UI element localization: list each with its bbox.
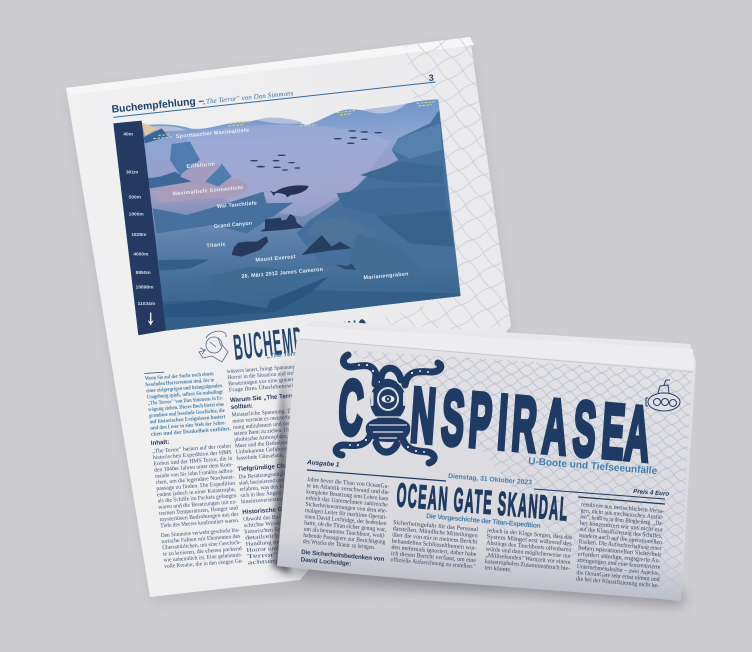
column 4: hohen operationellen Sicherheit — [578, 545, 662, 558]
column 1: onen David Lochridge, der bedenken — [304, 514, 387, 527]
fish schools — [250, 130, 382, 171]
intro text: Umgebung spielt, sollten Sie unbedingt — [147, 389, 223, 401]
intro text: „The Terror" von Dan Simmons in Er- — [147, 395, 224, 407]
section title: BUCHEMPFEHLUNG — [231, 312, 371, 368]
column 4: her konzentriert wir uns nicht nur — [580, 521, 663, 534]
second column text — [227, 363, 336, 566]
column 1: komplette Besatzung ums Leben kam — [306, 489, 389, 502]
column 2: ich diesen Bericht verfasst, um eine — [391, 550, 477, 564]
page number: 3 — [428, 73, 434, 83]
rule above column four — [578, 497, 665, 504]
column 3: System Mängel erst während des — [486, 534, 573, 547]
depth labels: 301m — [126, 169, 138, 175]
column 4: Unternehmenskultur – zwei Aspekte, — [577, 564, 661, 577]
second column text: Unbekannte Gefahren sorgen für — [235, 443, 314, 456]
price: Preis 4 Euro — [633, 488, 670, 498]
Mount Everest — [302, 235, 352, 255]
fishing net on back page — [300, 37, 511, 340]
column 4: erfordert ständige, engagierte An- — [578, 551, 661, 565]
column 3: jedoch in der Klage Sorgen, dass das — [486, 528, 573, 541]
James Cameron submersible — [335, 263, 357, 270]
second column text: hineinzuversetzen. — [241, 496, 284, 505]
Inhalt block: endete jedoch in einer Katastrophe, — [157, 487, 237, 498]
Dan Simmons paragraph: wie unheimlich ist. Eine geheimnis- — [163, 552, 243, 564]
column 1 — [300, 477, 390, 571]
tagline: U-Boote und Tiefseeunfälle — [528, 456, 658, 477]
second column text: Historische Genauigkeit: — [242, 504, 315, 516]
depth labels: 40m — [123, 131, 133, 137]
second column text: schichte Weisheit, basiert es auf — [243, 517, 322, 529]
column 4: auf die Klassifizierung des Schiffes, — [579, 526, 663, 540]
chart labels: Eiffelturm — [186, 162, 215, 170]
column 4 — [576, 502, 665, 589]
column 2: behandelten Schlüsselthemen wur- — [392, 539, 477, 552]
second column text: Frage ihres Überlebenswillens. — [228, 381, 308, 394]
second column text: wässern lauert, bringt Spannung und — [227, 364, 305, 375]
column 1: David Lochridge: — [300, 556, 351, 568]
Inhalt block: mysteriösen Bedrohungen aus der — [159, 512, 239, 523]
intro text — [144, 368, 232, 438]
second column text: Handlung macht das Buch für — [245, 535, 324, 548]
second column text: nung aufzubauen und den Leser in — [233, 418, 311, 431]
second column text: Meisterliche Spannung: Dan Sim- — [231, 407, 310, 418]
column 4: die OceanGate sehr ernst nimmt und — [576, 570, 660, 583]
column 2: darstellen. Mündliche Mitteilungen — [392, 526, 478, 539]
second column text: Die Besatzungsmitglieder sind viel- — [238, 469, 317, 480]
shadow under front newspaper — [272, 345, 686, 606]
second column text: sollten: — [230, 402, 253, 411]
newspaper columns — [300, 477, 665, 589]
column 3: „Millisekunden" Warnzeit vor einem — [485, 553, 571, 566]
second column text: Warum Sie „The Terror" lesen — [230, 391, 318, 404]
column 1: hatte, ob die Titan sicher genug war, — [304, 520, 387, 533]
fishing net on front page — [345, 350, 692, 596]
column 3: katastrophalen Zusammenbruch bie- — [485, 559, 570, 572]
intro text: auf historischen Ereignissen basiert — [149, 414, 226, 425]
pale surface band — [143, 103, 407, 131]
page heading: Buchempfehlung – — [111, 96, 205, 116]
second column text: Obwohl das Buch eine fiktive Ge- — [243, 511, 321, 523]
edition label: Ausgabe 1 — [306, 459, 340, 469]
depth labels: 10898m — [136, 285, 153, 291]
second column text: phobische Atmosphäre, das eisige — [234, 432, 313, 443]
Inhalt block: historischen Expedition der HMS — [153, 450, 232, 461]
depth labels: 11034m — [138, 301, 155, 307]
second column text: Terror" bietet eine — [247, 549, 326, 560]
left rocks — [143, 128, 168, 143]
second column text: Besatzungen vor eine grauenhafte — [228, 375, 307, 387]
column 1: Jahre bevor die Titan von OceanGa- — [307, 477, 389, 490]
second column text: fesselnde Gänsehaut. — [236, 452, 285, 462]
Inhalt block: als die Schiffe im Packeis gefangen — [157, 492, 237, 505]
chart labels: Mount Everest — [255, 254, 296, 264]
depth labels — [123, 131, 155, 307]
column 1: Sicherheitswarnungen von dem ehe- — [305, 502, 388, 515]
Dan Simmons paragraph: te zu kreieren, die ebenso packend — [163, 546, 242, 558]
back newspaper page — [66, 37, 512, 602]
column 1: maligen Leiter für maritime Operati- — [305, 507, 387, 521]
intro text: grandiose und fesselnde Geschichte, die — [149, 408, 226, 419]
Inhalt block: tremen Temperaturen, Hunger und — [159, 505, 238, 517]
Inhalt block: den 1840er Jahren unter dem Kom- — [154, 462, 233, 474]
column 1: Die Sicherheitsbedenken von — [301, 549, 385, 563]
Inhalt block: Tiefe des Meeres konfrontiert waren. — [160, 517, 240, 529]
depth labels: 8850m — [136, 270, 151, 276]
column 1: habende Passagiere zur Besichtigung — [303, 533, 386, 546]
second column text: mons versteht es meisterhaft, Span- — [232, 412, 311, 425]
Titanic wreck — [232, 236, 268, 257]
column 4: gen, nicht aus mechanischen Ausfäl- — [580, 507, 664, 521]
masthead — [336, 355, 653, 478]
column 4: sondern auch auf die operationellen — [579, 532, 662, 546]
header rule right — [534, 489, 665, 499]
second column text: seinen Bann zu ziehen. Die klaustro- — [233, 426, 312, 437]
letters NSPIRASEA: NSPIRASEA — [408, 371, 653, 478]
surface waves — [153, 102, 435, 139]
depth labels: 500m — [129, 195, 141, 201]
sand wedge — [142, 123, 158, 136]
icon: diving helmet — [366, 379, 410, 442]
Dan Simmons paragraph: volle Kreatur, die in den eisigen Ge- — [164, 558, 243, 570]
column 2: Sicherheitsgefahr für das Personal — [393, 519, 479, 533]
column 4: resultiere aus menschlichem Versa- — [581, 502, 664, 515]
chart labels: 26. März 2012 James Cameron — [241, 267, 323, 280]
intro text: und den Leser in eine Welt der Schre- — [150, 420, 227, 432]
Inhalt block: Inhalt: — [150, 439, 170, 447]
column 1: des Wracks der Titanic zu bringen. — [303, 539, 376, 551]
chart labels: Marianengraben — [363, 271, 409, 281]
intro text: cken und der Dunkelheit entführt. — [151, 426, 232, 438]
chart labels: Titanic — [206, 242, 226, 249]
column 4: len", heißt es in dem Blogbeitrag. „Da- — [580, 513, 664, 527]
column 4: strengungen und eine konzentrierte — [577, 558, 661, 571]
column 4: Risiken. Die Aufrechterhaltung einer — [578, 538, 662, 552]
Inhalt block: „The Terror" basiert auf der realen — [152, 442, 231, 455]
second column text: detailreich recherchierte — [245, 530, 324, 542]
column 1: um als bemanntes Tauchboot, wohl- — [304, 527, 386, 540]
second column text: erfahren, was den Leser dazu bringt — [239, 480, 318, 493]
second column text: Tiefgründige Charaktere: — [237, 461, 311, 473]
second column text: sich in ihre Ängste und Hoffnungen — [240, 487, 319, 499]
intro text: fesselnden Horrorroman sind, der in — [145, 377, 215, 388]
depth labels: 4000m — [133, 251, 148, 257]
headline: OCEAN GATE SKANDAL — [395, 477, 570, 528]
back page text columns — [144, 363, 336, 570]
date: Dienstag, 31 Oktober 2023 — [448, 473, 532, 487]
section title: „The Terror" — [266, 350, 307, 360]
depth chart illustration — [113, 99, 461, 335]
page heading — [111, 82, 436, 117]
subhead: Die Vorgeschichte der Titan-Expedition — [426, 513, 541, 530]
Inhalt block: waren und die Besatzungen mit ex- — [158, 499, 238, 511]
second column text: historischen Ereignissen, und die — [244, 524, 323, 535]
column 3: würde und dann möglicherweise nur — [486, 547, 571, 560]
column 1: erhielt das Unternehmen zahlreiche — [306, 496, 388, 509]
Inhalt block: chen, um die legendäre Nordwest- — [155, 474, 235, 486]
depth ruler — [113, 121, 166, 335]
top fold — [299, 326, 694, 370]
depth labels: 1000m — [129, 211, 144, 217]
chart labels — [172, 128, 409, 281]
central light — [187, 125, 392, 217]
icon: tentacle suckers — [349, 364, 429, 453]
icon: submarine — [646, 380, 680, 411]
chart labels: Sporttaucher Maximaltiefe — [176, 128, 249, 140]
column 2 — [390, 519, 479, 570]
second column text: Horror in die Situation und stellt die — [227, 370, 306, 381]
letter C: C — [336, 363, 366, 452]
sea background — [142, 99, 461, 331]
icon: octopus tentacles — [336, 355, 441, 463]
column 2: über die von mir in meinem Bericht — [392, 532, 478, 546]
icon: down arrow — [148, 313, 154, 326]
Inhalt block: passage zu finden. Die Expedition — [156, 480, 236, 492]
intro text: wägung ziehen. Dieses Buch bietet eine — [148, 402, 225, 413]
chart labels: Grand Canyon — [214, 221, 252, 230]
Dan Simmons paragraph: Dan Simmons verwebt geschickt his- — [161, 527, 240, 539]
Inhalt block: mando von Sir John Franklin aufbra- — [155, 467, 234, 480]
Dan Simmons paragraph — [161, 527, 244, 570]
column 3: ten könnte. — [484, 565, 512, 574]
chart labels: Wal Tauchtiefe — [217, 201, 257, 210]
whale — [270, 185, 309, 197]
Dan Simmons paragraph: Übernatürlichen, um eine Geschich- — [162, 539, 241, 551]
second column text: Meer und die Bedrohung durch das — [235, 438, 314, 449]
column 2: den mehrmals ignoriert, daher habe — [391, 545, 477, 558]
front folded newspaper — [277, 320, 696, 601]
right rock masses — [297, 110, 457, 267]
page heading: „The Terror" von Dan Simmons — [202, 89, 294, 106]
intro text: Wenn Sie auf der Suche nach einem — [145, 371, 214, 382]
header rule left — [307, 470, 446, 481]
second column text: sind, faszinierend und entwickeln sich — [239, 474, 317, 487]
column 4: die bei der Klassifizierung nicht be- — [576, 575, 659, 589]
column 1: te im Atlantik verschwand und die — [306, 483, 389, 496]
intro text: einer eisigergrigen und beängstigenden — [146, 383, 222, 394]
second column text: achtung auf hohem — [248, 554, 327, 566]
Inhalt block — [150, 434, 240, 529]
icon: diver — [199, 331, 228, 362]
column 3: Abstiegs des Tauchboots offenbaren — [486, 539, 572, 554]
column 2: offizielle Aufzeichnung zu erstellen." — [390, 556, 476, 570]
column 3 — [484, 528, 572, 572]
second column text: Horror und Geschichtsfans — [246, 541, 326, 554]
Grand Canyon block — [260, 214, 303, 232]
chart labels: Maximaltiefe Sonnenlicht — [172, 185, 243, 197]
Dan Simmons paragraph: torische Fakten mit Elementen des — [161, 534, 241, 545]
depth labels: 1828m — [131, 232, 146, 238]
Inhalt block: Erebus und der HMS Terror, die in — [153, 456, 233, 467]
